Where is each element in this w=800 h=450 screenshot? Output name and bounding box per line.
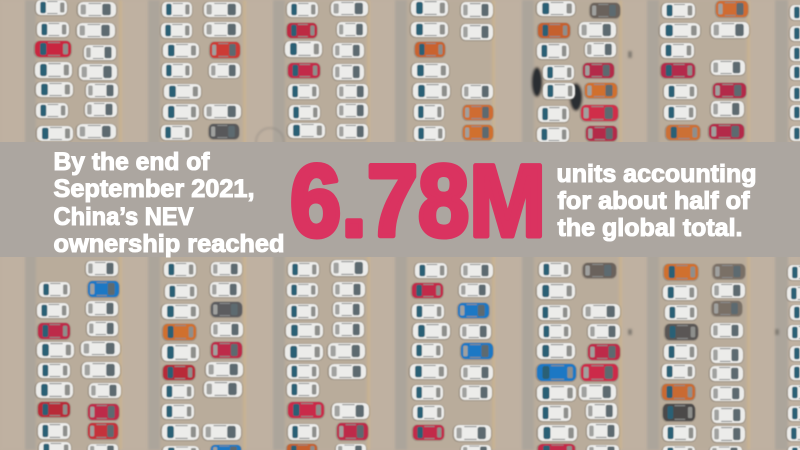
text block: conclusion: units accounting [556, 160, 756, 188]
grey banner panel [0, 142, 800, 257]
text block: conclusion: for about half of [558, 187, 750, 215]
big number: 6.78M [290, 144, 546, 258]
text block: conclusion: the global total. [558, 214, 742, 242]
text block: lead-in: China’s NEV [54, 203, 194, 231]
parked cars: bottom section [34, 259, 800, 450]
text block: lead-in: By the end of [54, 148, 210, 176]
text block: lead-in [54, 148, 284, 258]
text block: lead-in: ownership reached [54, 230, 284, 258]
parked cars: top section [33, 0, 800, 143]
text block: conclusion [556, 160, 756, 242]
text block: lead-in: September 2021, [54, 175, 254, 203]
